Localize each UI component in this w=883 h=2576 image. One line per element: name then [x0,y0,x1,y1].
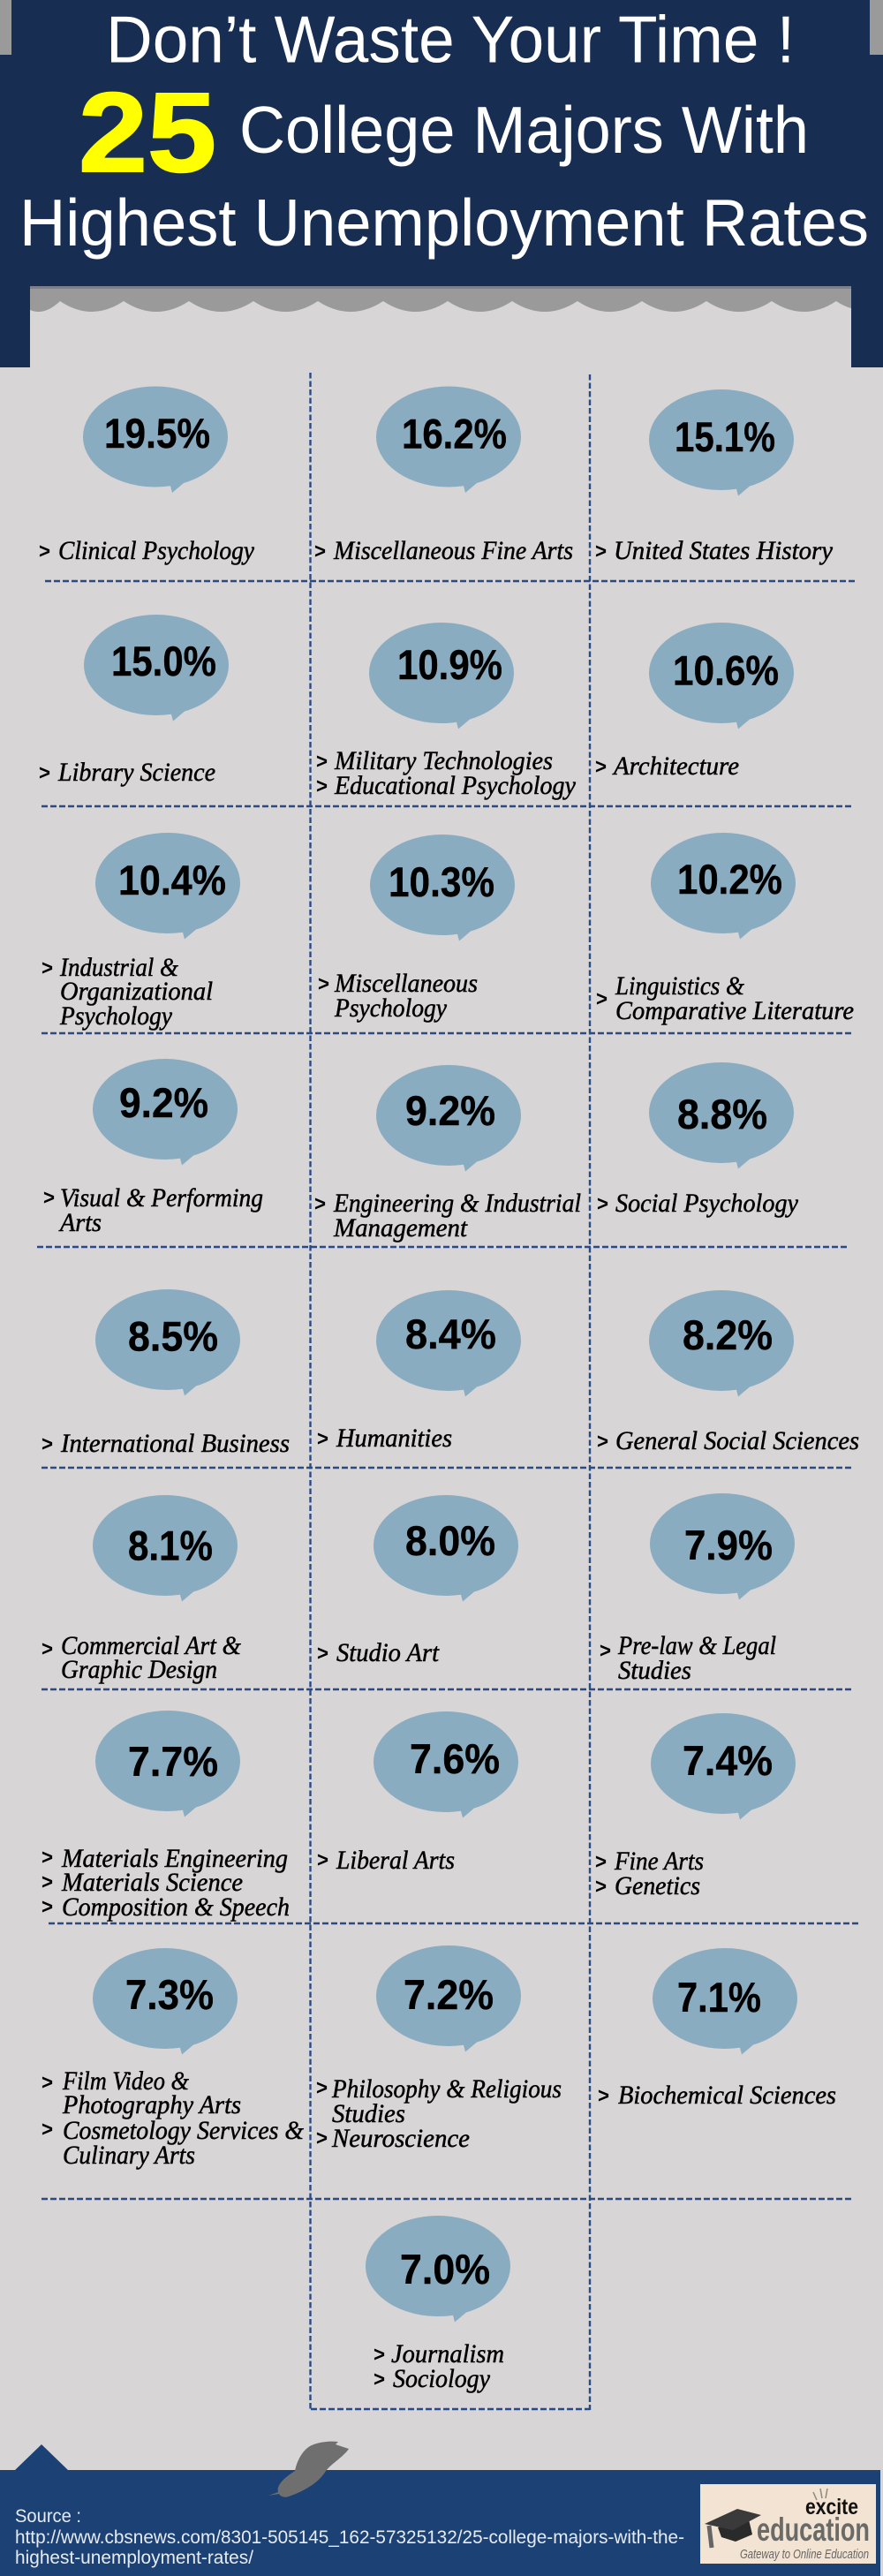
cell: 7.4% Fine Arts, Genetics: 7.4% [683,1737,773,1784]
cell: 7.2% Philosophy & Religious Studies, Neuroscience: > [316,2076,328,2100]
cell: 7.4% Fine Arts, Genetics [595,1713,796,1900]
cell: 7.2% Philosophy & Religious Studies, Neuroscience: Studies [332,2099,405,2128]
cell: 8.8% Social Psychology: > [597,1192,608,1216]
cell: 7.0% Journalism, Sociology [366,2216,510,2393]
cell: 8.1% Commercial Art & Graphic Design [42,1495,242,1684]
cell: 7.9% Pre-law & Legal Studies: Pre-law & Legal [617,1631,776,1660]
cell: 10.9% Military Technologies, Educational Psychology: Military Technologies [334,746,553,775]
cell: 7.9% Pre-law & Legal Studies [600,1493,795,1685]
cell: 10.9% Military Technologies, Educational Psychology [316,623,577,800]
cell: 10.9% Military Technologies, Educational Psychology: Educational Psychology [334,771,577,800]
header panel [0,0,883,367]
icon: feather [268,2442,349,2497]
cell: 7.3% Film Video & Photography Arts, Cosmetology Services & Culinary Arts: Film Video & [62,2066,190,2096]
cell: 9.2% Engineering & Industrial Management: 9.2% [405,1087,495,1134]
cell: 9.2% Engineering & Industrial Management: > [314,1192,326,1216]
cell: 9.2% Visual & Performing Arts: > [43,1186,55,1210]
cell: 7.1% Biochemical Sciences: Biochemical Sciences [618,2081,836,2110]
source text: Source : [15,2506,81,2527]
cell: 16.2% Miscellaneous Fine Arts [314,387,573,565]
cell: 7.3% Film Video & Photography Arts, Cosmetology Services & Culinary Arts: Photography Arts [62,2090,241,2119]
cell: 10.4% Industrial & Organizational Psychology: Psychology [59,1001,173,1031]
cell: 7.3% Film Video & Photography Arts, Cosmetology Services & Culinary Arts: > [42,2118,53,2142]
cell: 7.0% Journalism, Sociology: Sociology [393,2364,491,2393]
title: Highest Unemployment Rates [19,185,869,260]
title [19,2,869,260]
cell: 7.6% Liberal Arts: 7.6% [410,1735,500,1782]
cell: 8.0% Studio Art: Studio Art [336,1638,440,1667]
cell: 7.4% Fine Arts, Genetics: Genetics [615,1871,700,1900]
cell: 8.0% Studio Art: 8.0% [405,1517,495,1564]
cell: 10.6% Architecture [595,623,794,781]
cell: 10.3% Miscellaneous Psychology: 10.3% [389,858,494,905]
cell: 10.2% Linguistics & Comparative Literature [596,833,854,1025]
cell: 8.0% Studio Art: > [317,1642,328,1666]
cell: 8.5% International Business [42,1289,290,1458]
cell: 7.7% Materials Engineering, Materials Science, Composition & Speech: > [42,1870,53,1894]
cell: 7.2% Philosophy & Religious Studies, Neuroscience [316,1945,562,2153]
cell: 7.1% Biochemical Sciences: 7.1% [677,1974,761,2021]
cell: 10.6% Architecture: 10.6% [673,646,779,694]
cell: 7.7% Materials Engineering, Materials Science, Composition & Speech: 7.7% [128,1738,218,1785]
cell: 7.0% Journalism, Sociology: Journalism [391,2339,504,2368]
cell: 15.1% United States History [595,389,834,565]
cell: 10.6% Architecture: > [595,755,607,779]
title: College Majors With [239,93,809,167]
cell: 8.4% Humanities: > [317,1427,328,1451]
cell: 10.2% Linguistics & Comparative Literature: Comparative Literature [615,996,854,1025]
cell: 10.3% Miscellaneous Psychology: Miscellaneous [334,969,478,998]
cell: 9.2% Visual & Performing Arts: Visual & Performing [60,1183,263,1212]
cell: 15.0% Library Science [39,615,229,787]
logo: excite education: excite [805,2495,858,2519]
cell: 19.5% Clinical Psychology [39,387,255,565]
cell: 9.2% Engineering & Industrial Management [314,1065,581,1243]
cell: 8.5% International Business: 8.5% [128,1312,218,1360]
cell: 9.2% Visual & Performing Arts [43,1059,263,1237]
cell: 15.0% Library Science: 15.0% [111,638,216,684]
cell: 7.6% Liberal Arts: > [317,1848,328,1872]
cell: 7.3% Film Video & Photography Arts, Cosmetology Services & Culinary Arts: > [42,2071,53,2095]
cell: 7.0% Journalism, Sociology: > [374,2368,385,2391]
cell: 10.9% Military Technologies, Educational Psychology: > [316,750,328,774]
cell: 10.4% Industrial & Organizational Psychology: 10.4% [118,857,226,903]
cell: 8.1% Commercial Art & Graphic Design: Commercial Art & [61,1631,242,1660]
cell: 8.0% Studio Art [317,1495,518,1667]
cell: 7.2% Philosophy & Religious Studies, Neuroscience: Neuroscience [331,2124,470,2153]
cell: 16.2% Miscellaneous Fine Arts: > [314,540,326,563]
cell: 10.4% Industrial & Organizational Psychology: > [42,956,53,980]
cell: 7.9% Pre-law & Legal Studies: > [600,1639,611,1663]
cell: 10.4% Industrial & Organizational Psychology [42,833,240,1031]
cell: 7.3% Film Video & Photography Arts, Cosmetology Services & Culinary Arts: 7.3% [125,1971,214,2018]
cell: 7.3% Film Video & Photography Arts, Cosmetology Services & Culinary Arts: Cosmetology Services & [63,2116,305,2145]
cell: 10.2% Linguistics & Comparative Literature: Linguistics & [615,971,745,1001]
cell: 8.8% Social Psychology [597,1062,799,1218]
cell: 8.4% Humanities [317,1290,521,1453]
cell: 10.4% Industrial & Organizational Psychology: Industrial & [59,953,179,982]
cell: 7.6% Liberal Arts [317,1711,518,1875]
cell: 16.2% Miscellaneous Fine Arts: Miscellaneous Fine Arts [333,536,573,565]
cell: 7.1% Biochemical Sciences [598,1948,836,2110]
cell: 9.2% Visual & Performing Arts: 9.2% [119,1079,208,1126]
cell: 7.2% Philosophy & Religious Studies, Neuroscience: Philosophy & Religious [331,2074,562,2104]
cell: 7.3% Film Video & Photography Arts, Cosmetology Services & Culinary Arts: Culinary Arts [63,2141,195,2170]
cell: 7.2% Philosophy & Religious Studies, Neuroscience: > [316,2127,328,2150]
cell: 8.4% Humanities: Humanities [336,1424,452,1453]
cell: 15.1% United States History: 15.1% [675,413,775,460]
cell: 8.8% Social Psychology: Social Psychology [615,1189,799,1218]
cell: 8.2% General Social Sciences: > [597,1430,608,1454]
cell: 8.1% Commercial Art & Graphic Design: > [42,1637,53,1661]
cell: 7.7% Materials Engineering, Materials Science, Composition & Speech: > [42,1846,53,1870]
cell: 7.1% Biochemical Sciences: > [598,2084,609,2108]
cell: 7.4% Fine Arts, Genetics: > [595,1850,607,1874]
cell: 10.3% Miscellaneous Psychology [318,835,515,1023]
footer panel [0,2444,880,2576]
title: 25 [79,70,216,196]
cell: 8.5% International Business: International Business [60,1429,290,1458]
cell: 10.4% Industrial & Organizational Psychology: Organizational [60,977,213,1006]
cell: 8.4% Humanities: 8.4% [405,1311,496,1357]
cell: 7.7% Materials Engineering, Materials Science, Composition & Speech: Materials Science [61,1868,243,1897]
cell: 10.9% Military Technologies, Educational Psychology: 10.9% [397,641,502,688]
cell: 10.9% Military Technologies, Educational Psychology: > [316,774,328,798]
cell: 7.4% Fine Arts, Genetics: > [595,1875,607,1899]
cell: 15.1% United States History: > [595,540,607,563]
cell: 8.2% General Social Sciences: General Social Sciences [615,1426,859,1455]
cell: 7.9% Pre-law & Legal Studies: Studies [618,1656,691,1685]
cell: 7.7% Materials Engineering, Materials Science, Composition & Speech: Materials Engineering [61,1844,288,1873]
cell: 9.2% Engineering & Industrial Management: Engineering & Industrial [333,1189,581,1218]
cell: 7.9% Pre-law & Legal Studies: 7.9% [684,1522,773,1568]
cell: 10.3% Miscellaneous Psychology: > [318,972,329,996]
cell: 7.6% Liberal Arts: Liberal Arts [336,1846,455,1875]
cell: 19.5% Clinical Psychology: Clinical Psychology [58,536,255,565]
cell: 8.2% General Social Sciences: 8.2% [683,1311,773,1358]
cell: 19.5% Clinical Psychology: 19.5% [104,410,210,457]
cell: 7.3% Film Video & Photography Arts, Cosmetology Services & Culinary Arts [42,1948,305,2170]
cell: 8.5% International Business: > [42,1432,53,1456]
source text [15,2506,684,2568]
cell: 8.1% Commercial Art & Graphic Design: Graphic Design [61,1655,217,1684]
logo: excite education [700,2484,876,2564]
cell: 8.1% Commercial Art & Graphic Design: 8.1% [128,1522,213,1568]
cell: 9.2% Visual & Performing Arts: Arts [58,1208,102,1237]
cell: 8.8% Social Psychology: 8.8% [677,1091,767,1137]
cell: 10.6% Architecture: Architecture [612,752,739,781]
cell: 9.2% Engineering & Industrial Management: Management [333,1213,468,1243]
cell: 15.1% United States History: United States History [614,536,834,565]
cell: 7.7% Materials Engineering, Materials Science, Composition & Speech [42,1711,290,1922]
cell: 8.2% General Social Sciences [597,1290,859,1455]
cell: 7.7% Materials Engineering, Materials Science, Composition & Speech: > [42,1895,53,1919]
source text: http://www.cbsnews.com/8301-505145_162-57325132/25-college-majors-with-the- [15,2527,684,2548]
cell: 7.0% Journalism, Sociology: 7.0% [400,2246,490,2293]
cell: 7.4% Fine Arts, Genetics: Fine Arts [614,1847,704,1876]
cell: 7.0% Journalism, Sociology: > [374,2343,385,2367]
cell: 16.2% Miscellaneous Fine Arts: 16.2% [402,410,507,457]
cell: 7.2% Philosophy & Religious Studies, Neuroscience: 7.2% [404,1971,494,2018]
grid lines [37,373,859,2410]
title: Don’t Waste Your Time ! [106,2,795,76]
cell: 15.0% Library Science: > [39,761,50,785]
cell: 10.2% Linguistics & Comparative Literature: 10.2% [677,856,782,903]
cell: 15.0% Library Science: Library Science [57,758,215,787]
cell: 10.2% Linguistics & Comparative Literature: > [596,987,608,1011]
cell: 10.3% Miscellaneous Psychology: Psychology [334,993,448,1023]
cell: 7.7% Materials Engineering, Materials Science, Composition & Speech: Composition & Speech [62,1892,290,1922]
cell: 19.5% Clinical Psychology: > [39,540,50,563]
source text: highest-unemployment-rates/ [15,2548,253,2568]
